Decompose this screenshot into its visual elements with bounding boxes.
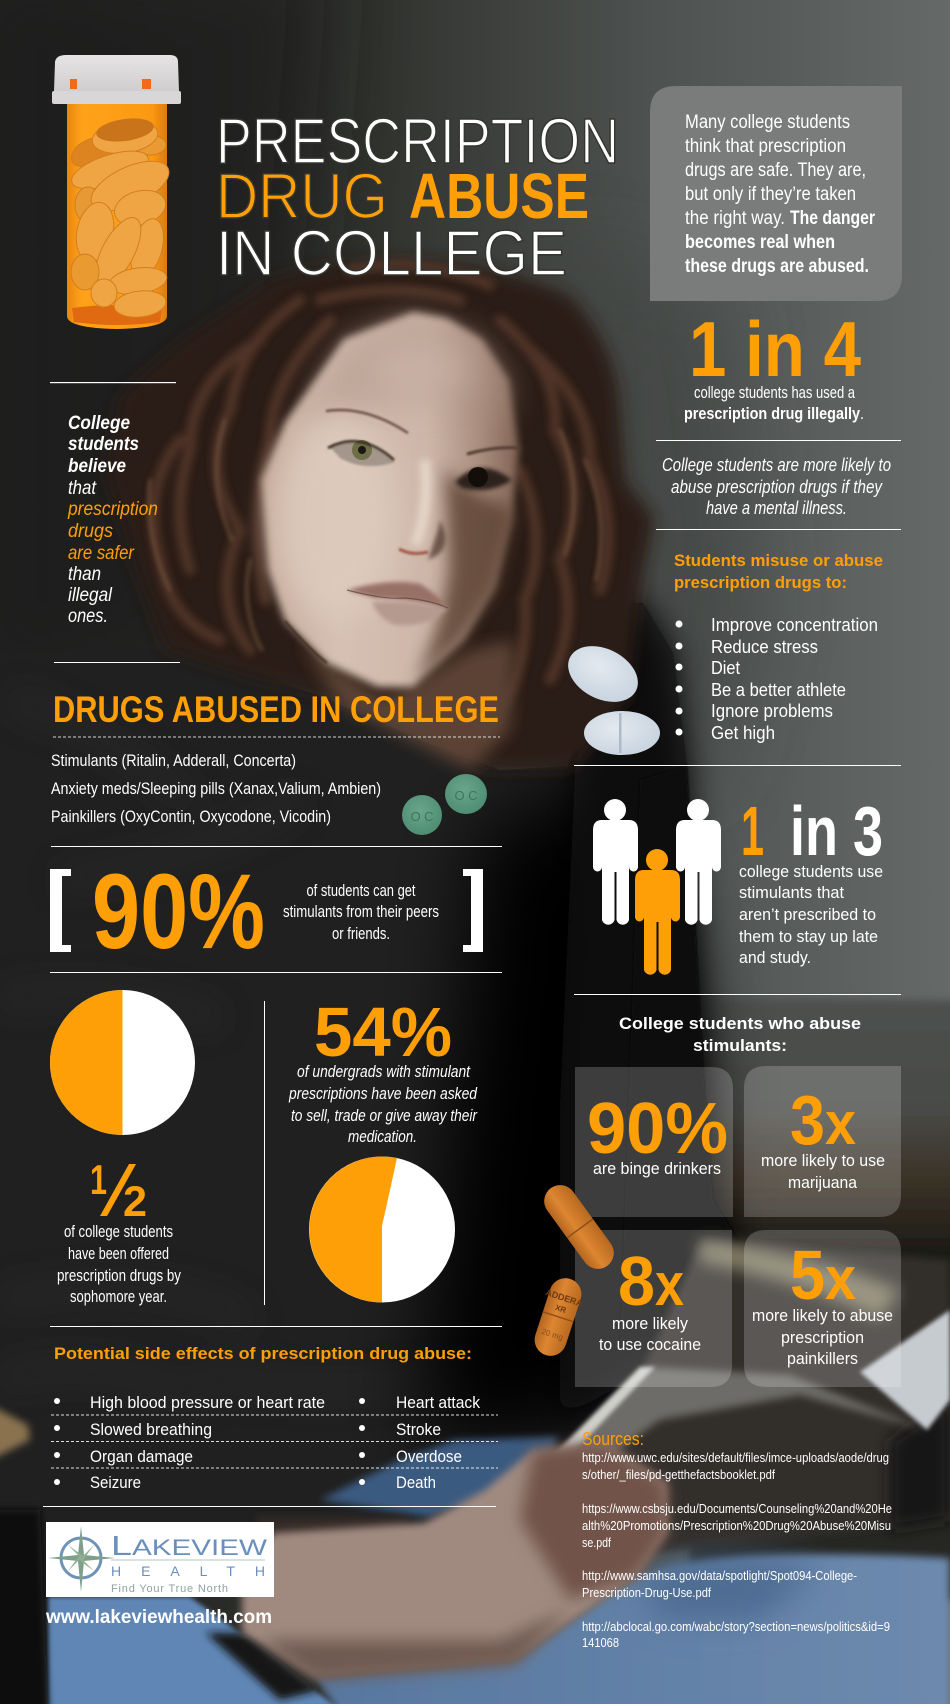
stat: 90% of students: 90% — [92, 851, 265, 971]
panel: 8x cocaine: 8 — [618, 1242, 655, 1320]
text block: mental illness: have a mental illness. — [706, 498, 847, 518]
panel: 8x cocaine: more likely — [612, 1314, 688, 1333]
text block: sources: http://www.samhsa.gov/data/spotlight/Spot094-College- — [582, 1569, 857, 1583]
panel: 3x marijuana: x — [825, 1090, 856, 1157]
list: potential side effects: Seizure — [90, 1473, 141, 1492]
left eye — [330, 442, 395, 466]
panel: drugs abused in college: Stimulants (Ritalin, Adderall, Concerta) — [51, 751, 296, 770]
logo: Lakeview Health: Find Your True North — [111, 1583, 228, 1595]
icon: orange capsules: 20 mg — [540, 1327, 564, 1342]
list: reasons for misuse: Improve concentration — [711, 615, 878, 635]
chart: 54 percent pie — [309, 1156, 455, 1302]
text block: believe prescription drugs are safer: prescription — [67, 499, 158, 520]
stat: 54% of undergrads: prescriptions have been asked — [288, 1084, 477, 1103]
text block: sources — [582, 1429, 892, 1650]
panel: 8x cocaine: to use cocaine — [599, 1335, 701, 1354]
stat: 1 in 3: and study. — [739, 948, 811, 967]
icon: orange capsules: ADDERA — [544, 1287, 585, 1309]
panel: 90% binge drinkers: 90% — [587, 1089, 728, 1169]
text block: believe prescription drugs are safer: illegal — [68, 585, 113, 606]
list: reasons for misuse: Students misuse or abuse — [674, 551, 883, 570]
list: potential side effects: Overdose — [396, 1447, 462, 1466]
text block: believe prescription drugs are safer: than — [68, 564, 101, 585]
text block: believe prescription drugs are safer: ones. — [68, 606, 108, 627]
list: potential side effects: Potential side effects of prescription drug abuse: — [54, 1344, 472, 1363]
panel: 90% binge drinkers — [575, 1067, 733, 1217]
panel: 3x marijuana — [744, 1066, 901, 1217]
panel: intro callout: the right way. — [685, 208, 785, 229]
panel: 8x cocaine — [575, 1230, 732, 1387]
jeans — [315, 1554, 950, 1704]
panel: 5x painkillers: more likely to abuse — [752, 1306, 893, 1325]
sweater — [0, 603, 740, 1560]
stat: one half offered: of college students — [64, 1222, 173, 1241]
text block: sources: s/other/_files/pd-getthefactsbooklet.pdf — [582, 1468, 775, 1482]
stat: 1 in 4: college students has used a — [694, 383, 855, 402]
title — [216, 105, 619, 289]
panel: intro callout: drugs are safe. They are, — [685, 160, 866, 181]
stat: one half offered: 1 — [90, 1156, 107, 1203]
stat: 54% of undergrads: of undergrads with stimulant — [297, 1062, 471, 1081]
lower background wall — [690, 1000, 950, 1600]
stat: 1 in 3: college students use — [739, 862, 883, 881]
text block: believe prescription drugs are safer: students — [68, 434, 139, 455]
icon: orange capsules — [527, 1179, 620, 1361]
panel: 5x painkillers: 5 — [790, 1236, 825, 1314]
title: ABUSE — [409, 160, 589, 232]
list: reasons for misuse: Reduce stress — [711, 637, 818, 657]
chart: one half pie — [50, 990, 195, 1135]
list: potential side effects — [51, 1344, 498, 1492]
icon: three people — [593, 799, 721, 975]
panel: 5x painkillers: prescription — [781, 1328, 864, 1347]
logo: Lakeview Health — [46, 1522, 274, 1597]
icon: white pills — [559, 635, 660, 755]
face — [261, 312, 519, 687]
heading: students who abuse stimulants: stimulants: — [693, 1036, 787, 1055]
text block: believe prescription drugs are safer: are safer — [68, 543, 135, 564]
icon: pill bottle — [52, 55, 181, 329]
title: IN COLLEGE — [216, 217, 567, 289]
text block: sources: Sources: — [582, 1429, 644, 1449]
list: potential side effects: Death — [396, 1473, 436, 1492]
text block: sources: http://abclocal.go.com/wabc/story?section=news/politics&id=9 — [582, 1620, 890, 1634]
panel: intro callout: becomes real when — [685, 232, 835, 253]
icon: green OC pills — [402, 774, 487, 835]
heading: students who abuse stimulants: College students who abuse — [619, 1014, 861, 1033]
stat: 90% of students: stimulants from their peers — [283, 902, 439, 921]
stat: 1 in 3 — [739, 792, 883, 967]
panel: intro callout: Many college students — [685, 112, 850, 133]
icon: orange capsules: XR — [554, 1303, 568, 1315]
panel: 5x painkillers — [744, 1230, 901, 1387]
text block: mental illness — [662, 455, 891, 518]
text block: sources: http://www.uwc.edu/sites/default/files/imce-uploads/aode/drug — [582, 1451, 889, 1465]
panel: intro callout: The danger — [790, 208, 876, 229]
stat: 54% of undergrads — [288, 993, 478, 1146]
dark side of sweater — [420, 770, 700, 1440]
text block: sources: 141068 — [582, 1636, 619, 1650]
stat: one half offered: 2 — [123, 1178, 147, 1226]
panel: drugs abused in college — [51, 689, 500, 826]
stat: 54% of undergrads: medication. — [348, 1127, 417, 1146]
list: reasons for misuse: Diet — [711, 658, 740, 678]
logo: Lakeview Health: HEALTH — [111, 1563, 265, 1579]
text block: mental illness: College students are more likely to — [662, 455, 891, 475]
panel: 3x marijuana: 3 — [790, 1081, 825, 1159]
text block: sources: https://www.csbsju.edu/Documents/Counseling%20and%20He — [582, 1502, 892, 1516]
stat: 1 in 4 — [684, 305, 864, 423]
text block: believe prescription drugs are safer: College — [68, 413, 130, 434]
neck — [300, 640, 515, 770]
stat: 90% of students: of students can get — [306, 881, 416, 900]
panel: 5x painkillers: x — [825, 1245, 856, 1312]
lips — [347, 582, 448, 608]
panel: drugs abused in college: Painkillers (OxyContin, Oxycodone, Vicodin) — [51, 807, 331, 826]
hand — [242, 1443, 667, 1677]
text block: mental illness: abuse prescription drugs if they — [671, 477, 883, 497]
text block: sources: se.pdf — [582, 1536, 611, 1550]
stat: one half offered: prescription drugs by — [57, 1266, 181, 1285]
list: potential side effects: Stroke — [396, 1420, 441, 1439]
list: potential side effects: Heart attack — [396, 1393, 480, 1412]
icon: green OC pills: O C — [454, 788, 478, 803]
right eye — [455, 468, 512, 490]
stat: 1 in 3: stimulants that — [739, 883, 844, 902]
panel: intro callout — [650, 86, 902, 301]
text block: believe prescription drugs are safer: believe — [68, 456, 126, 477]
panel: drugs abused in college: Anxiety meds/Sleeping pills (Xanax,Valium, Ambien) — [51, 779, 381, 798]
website url: www.lakeviewhealth.com — [45, 1607, 272, 1628]
left tan blob — [0, 1405, 30, 1460]
stat: one half offered: sophomore year. — [70, 1287, 167, 1306]
panel: drugs abused in college: DRUGS ABUSED IN COLLEGE — [53, 689, 499, 730]
heading: students who abuse stimulants — [619, 1014, 861, 1055]
stat: 54% of undergrads: to sell, trade or give away their — [291, 1106, 478, 1125]
list: potential side effects: High blood pressure or heart rate — [90, 1393, 325, 1412]
logo: Lakeview Health: LAKEVIEW — [111, 1530, 267, 1561]
title: DRUG — [216, 160, 388, 232]
stat: 1 in 3: 1 — [741, 792, 764, 870]
stat: one half offered: have been offered — [68, 1244, 169, 1263]
panel: intro callout: think that prescription — [685, 136, 846, 157]
stat: 1 in 3: them to stay up late — [739, 927, 878, 946]
panel: 5x painkillers: painkillers — [787, 1349, 858, 1368]
panel: 90% binge drinkers: are binge drinkers — [593, 1159, 721, 1178]
list: reasons for misuse: Get high — [711, 723, 775, 743]
title: PRESCRIPTION — [216, 105, 619, 177]
list: reasons for misuse: Ignore problems — [711, 701, 833, 721]
hair — [105, 260, 654, 770]
text block: sources: alth%20Promotions/Prescription%20Drug%20Abuse%20Misu — [582, 1519, 891, 1533]
stat: 1 in 3: aren’t prescribed to — [739, 905, 876, 924]
book page block — [500, 1367, 927, 1520]
stat: 90% of students — [50, 851, 483, 971]
stat: 90% of students: or friends. — [332, 924, 390, 943]
text block: sources: Prescription-Drug-Use.pdf — [582, 1586, 711, 1600]
stat: 1 in 4: 1 in 4 — [689, 305, 861, 393]
list: potential side effects: Organ damage — [90, 1447, 193, 1466]
stat: 54% of undergrads: 54% — [314, 993, 452, 1071]
list: potential side effects: Slowed breathing — [90, 1420, 212, 1439]
panel: 3x marijuana: more likely to use — [761, 1151, 885, 1170]
text block: believe prescription drugs are safer — [67, 413, 158, 627]
icon: green OC pills: O C — [410, 809, 434, 824]
panel: intro callout: but only if they’re taken — [685, 184, 856, 205]
panel: intro callout: these drugs are abused. — [685, 256, 869, 277]
panel: 8x cocaine: x — [655, 1251, 684, 1318]
panel: 3x marijuana: marijuana — [788, 1173, 857, 1192]
book cover and interior — [500, 1240, 950, 1560]
list: reasons for misuse: prescription drugs to: — [674, 573, 847, 592]
stat: 1 in 4: prescription drug illegally. — [684, 404, 864, 423]
list: reasons for misuse: Be a better athlete — [711, 680, 846, 700]
text block: believe prescription drugs are safer: drugs — [68, 521, 113, 542]
list: reasons for misuse — [674, 551, 883, 743]
stat: one half offered — [57, 1156, 181, 1306]
stat: 1 in 3: in 3 — [790, 792, 883, 870]
text block: believe prescription drugs are safer: that — [68, 478, 97, 499]
